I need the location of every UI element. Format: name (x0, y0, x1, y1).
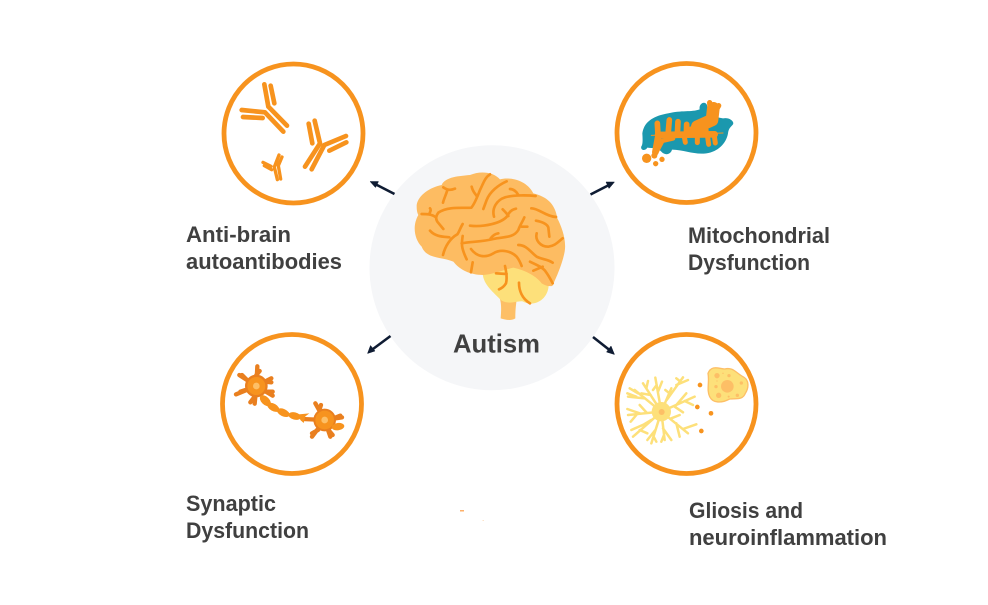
label: Gliosis and neuroinflammation (689, 498, 887, 550)
label: Gliosis and neuroinflammation: Gliosis and (689, 498, 803, 523)
label: Anti-brain autoantibodies (186, 222, 342, 274)
arrow: to gliosis and neuroinflammation (593, 337, 614, 354)
label: Synaptic Dysfunction (186, 491, 309, 543)
icon: glial cell and microglia (627, 368, 748, 443)
label: Mitochondrial Dysfunction: Mitochondrial (688, 223, 830, 248)
label: Anti-brain autoantibodies: autoantibodies (186, 249, 342, 274)
arrow: to mitochondrial dysfunction (590, 182, 614, 194)
icon: brain (415, 172, 565, 320)
panel: gliosis and neuroinflammation (617, 334, 887, 550)
arrow: to anti-brain autoantibodies (370, 182, 394, 194)
panel: mitochondrial dysfunction (617, 64, 830, 275)
label: Mitochondrial Dysfunction (688, 223, 830, 275)
label: Anti-brain autoantibodies: Anti-brain (186, 222, 291, 247)
panel: central Autism circle (370, 145, 614, 390)
label: Synaptic Dysfunction: Synaptic (186, 491, 276, 516)
panel: synaptic dysfunction (186, 334, 362, 543)
label: Synaptic Dysfunction: Dysfunction (186, 518, 309, 543)
icon: neurons (236, 366, 345, 437)
icon: mitochondrion (641, 103, 733, 166)
icon: antibodies (242, 84, 346, 180)
heading: Autism: Autism (453, 328, 540, 358)
label: Mitochondrial Dysfunction: Dysfunction (688, 250, 810, 275)
arrow: to synaptic dysfunction (368, 336, 390, 354)
panel: anti-brain autoantibodies (186, 64, 363, 274)
label: Gliosis and neuroinflammation: neuroinflammation (689, 525, 887, 550)
